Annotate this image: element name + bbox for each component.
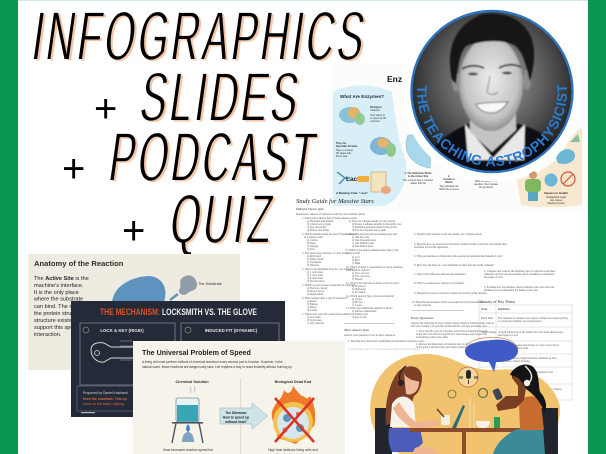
short answer column three: 5. Why are neutrinos so important in the supernova explosion mechanism of stars? — [414, 255, 504, 258]
glossary table: and rotating quickly — [498, 391, 520, 394]
step captions: within the enzyme — [439, 188, 460, 191]
headphones — [525, 366, 532, 384]
plus signs — [62, 87, 145, 253]
panel: study guide document — [296, 198, 572, 400]
caption: impact on health — [544, 191, 568, 205]
caption: impact on health: bloating & pain — [547, 201, 565, 205]
icon: left sparkle badge — [448, 390, 456, 398]
slide body text: It is the only place — [34, 290, 79, 296]
label column: They Are — [336, 142, 347, 145]
slide body text: The Active Site is the — [34, 276, 89, 282]
title shadow: QUIZ — [168, 181, 283, 259]
label column: Catalysts — [370, 109, 381, 112]
panel: lock and key — [80, 323, 175, 385]
icon: protein structure two — [370, 137, 396, 157]
slide heading: Anatomy of the Reaction — [34, 259, 124, 268]
peach health blob — [517, 128, 582, 207]
standing microphone — [470, 398, 474, 428]
icon: key — [91, 343, 135, 362]
short answer column three: 4. Describe how an onion-layer structure is formed inside of massive stars during their — [414, 243, 507, 246]
step captions — [403, 172, 499, 191]
caption: left: Heat increases reaction speed but — [163, 448, 213, 452]
multiple choice column two: c) Radiation pressure balances the gravity — [352, 226, 398, 229]
fringe — [404, 370, 420, 382]
glossary table: following the collapse event — [498, 347, 529, 350]
step captions: Work to catalyse the — [475, 180, 498, 183]
long hair — [512, 364, 546, 412]
arrow: the dilemma: How to speed up — [223, 416, 249, 420]
short answer column three: 1. Trace the life cycle of a massive star from its formation through — [416, 330, 488, 333]
multiple choice column one: a) Red dwarf — [307, 255, 321, 258]
multiple choice column one: b) Carbon and oxygen — [307, 223, 332, 226]
step captions: 2. — [448, 175, 450, 178]
short answer column three: evolution toward the supernova — [414, 246, 449, 249]
essay prompts right column: neutrinos have in modelling the deaths of the stars — [484, 289, 538, 292]
footer text box: move on the teach, helping — [83, 402, 124, 406]
multiple choice column two: a) Explosion — [352, 285, 366, 288]
label column: 3D shape that — [336, 152, 351, 155]
label column: Biological — [370, 106, 382, 109]
footer text box: Proposed by Daniel Koshland — [83, 391, 128, 395]
multiple choice column two — [344, 220, 425, 351]
neck — [470, 108, 516, 152]
step captions: the products — [479, 186, 494, 189]
essay prompts right column: remnants and how the observations allow scientists to understand — [484, 273, 555, 276]
title shadow: SLIDES — [138, 59, 309, 137]
multiple choice column two: c) G-type — [352, 304, 363, 307]
multiple choice column two: b) Implosion — [352, 288, 366, 291]
caption: impact on health: Undigested sugar — [546, 195, 566, 199]
multiple choice column two: a) The core collapses under its own gravity — [349, 220, 396, 223]
caption: right: High heat destroys living cells and — [268, 448, 318, 452]
glossary table: The remnant of a massive star whose collapse has caused gravity — [498, 317, 569, 320]
multiple choice column two: Answer each question in two to three sentences. — [344, 334, 396, 337]
glossary table: Definition — [498, 308, 510, 311]
slide: Anatomy of the Reaction — [28, 254, 240, 370]
slide body text: interaction. — [34, 332, 62, 338]
heading: What Are Enzymes: What Are Enzymes? — [340, 94, 384, 99]
multiple choice column one: Instructions: Answer all questions with the best available option — [296, 213, 365, 216]
title lettering: SLIDES — [136, 57, 307, 136]
icon: beaker on burner — [172, 386, 203, 443]
label column — [336, 106, 387, 158]
multiple choice column two: c) High — [352, 262, 361, 265]
bowl — [476, 421, 490, 428]
multiple choice column one: 4. What is the minimum mass for core collapse? — [302, 268, 355, 271]
woman on the right — [492, 364, 546, 454]
multiple choice column one: a) Pulsar — [307, 300, 317, 303]
essay prompts right column — [484, 270, 555, 292]
multiple choice column one: of a massive star? — [304, 236, 324, 239]
multiple choice column one: d) Neutron — [307, 264, 319, 267]
multiple choice column one: b) Solar mass — [307, 319, 322, 322]
step captions: 1. The Substrate Binds — [404, 172, 432, 175]
label column: Specialist Proteins — [336, 145, 358, 148]
blue background blob — [333, 85, 407, 206]
icon: burning cell crossed out — [272, 386, 315, 444]
shirt — [465, 124, 525, 160]
short answer column three: 3. Explain what happens to the star during core collapse events — [414, 233, 482, 236]
enzyme blob — [112, 276, 165, 302]
multiple choice column one: c) Iron and nickel — [307, 226, 326, 229]
divider — [239, 378, 242, 454]
multiple choice column one: c) Very massive — [307, 322, 325, 325]
portrait badge: The Teaching Astrophysicist — [410, 10, 574, 174]
multiple choice column one: c) Alpha ladder — [307, 293, 324, 296]
heading: study guide: Study Guide for Massive Stars — [296, 198, 374, 205]
panel: lock and key: LOCK & KEY (RIGID) — [100, 328, 144, 333]
multiple choice column two: c) One million years — [352, 242, 374, 245]
multiple choice column one: d) Iron — [307, 248, 315, 251]
green can — [494, 417, 500, 428]
white top — [390, 396, 416, 427]
icon: lactase molecule — [337, 172, 391, 194]
ears — [452, 72, 460, 92]
footer text box — [77, 386, 137, 413]
icon: microphone badge — [458, 367, 478, 387]
short answer column three: 2. Discuss the importance of massive stars in the chemical enrichment — [416, 343, 492, 346]
title: Infographics + Slides + Podcast + Quiz — [28, 0, 375, 259]
glossary table — [478, 299, 572, 400]
hair top — [510, 367, 519, 378]
multiple choice column one: 3. The onion layer structure of a star forms — [302, 252, 348, 255]
multiple choice column one: a) Electron capture — [307, 287, 328, 290]
panel: enzymes infographic — [331, 64, 585, 210]
legs — [412, 446, 438, 454]
slide body text: the protein structure — [34, 311, 84, 317]
short answer column three: to the end of its life and explain how mass shapes each stage of its — [416, 333, 487, 336]
multiple choice column two: c) Age of star — [352, 316, 367, 319]
multiple choice column one: 1. What is the primary fuel of main sequence stars? — [302, 217, 358, 220]
face — [404, 371, 419, 395]
nose shade — [487, 76, 498, 94]
icon: lactase molecule: Lact — [346, 176, 360, 183]
multiple choice column one: 5. Which process produces neutrinos in collapse? — [302, 284, 356, 287]
multiple choice column two: Short-Answer Quiz — [344, 328, 369, 332]
multiple choice column two: a) Low — [352, 256, 360, 259]
multiple choice column two: 11. What is the outcome of shock revival in stars? — [346, 282, 400, 285]
multiple choice column one: c) Oxygen — [307, 245, 319, 248]
multiple choice column two: c) Accretion — [352, 291, 366, 294]
multiple choice column one: d) 50 solar mass — [307, 280, 325, 283]
multiple choice column one: b) Neon — [307, 242, 316, 245]
short answer column three: 8. What is a neutron star and how is it formed? — [414, 282, 465, 285]
multiple choice column two: c) Fission — [352, 278, 363, 281]
glossary table: on the path to silicon burning — [498, 360, 530, 363]
essay prompts right column: 4. Compare and contrast the different types of supernova and their — [484, 270, 555, 273]
short answer column three: Essay Questions — [411, 316, 434, 320]
footer text box: fixes the substrate. This sp — [83, 397, 127, 401]
multiple choice column two: d) The star expands into a giant — [352, 229, 386, 232]
icon: pie and no sign — [544, 134, 580, 186]
arrow: the dilemma: without heat? — [224, 420, 247, 424]
multiple choice column one: b) White dwarf — [307, 258, 323, 261]
slide body text: can bind. The rest of — [34, 304, 85, 310]
icon: protein structure one — [339, 107, 365, 125]
multiple choice column one: b) Proton decay — [307, 290, 325, 293]
multiple choice column one: a) Hydrogen and helium — [307, 220, 334, 223]
label column: fits its task — [336, 155, 348, 158]
title lettering: PODCAST — [105, 117, 324, 196]
multiple choice column two: b) The s-process — [352, 275, 370, 278]
multiple choice column one: a) Carbon — [307, 239, 318, 242]
substrate label: The Substrate — [198, 282, 222, 286]
caption: impact on health: Impact on Health — [544, 191, 568, 195]
face and arm — [496, 372, 526, 411]
step captions: Creates a — [443, 178, 455, 181]
hair — [386, 366, 422, 425]
blue skirt — [388, 428, 423, 452]
jacket — [434, 123, 553, 171]
step captions: The enzyme has a complex — [403, 179, 434, 182]
smile — [476, 102, 508, 113]
multiple choice column one: b) Nebula — [307, 303, 318, 306]
multiple choice column two: 13. What does luminosity depend on most? — [346, 307, 393, 310]
step captions: Match — [445, 181, 453, 184]
multiple choice column two: d) One billion years — [352, 245, 373, 248]
multiple choice column one: d) Silicon and sulfur — [307, 229, 329, 232]
phone — [492, 388, 503, 401]
step captions: reaction, then release — [474, 183, 499, 186]
label column: reactions — [370, 120, 381, 123]
multiple choice column one — [296, 207, 365, 325]
slide body text: structure exists to — [34, 318, 78, 324]
white halo around portrait — [402, 2, 582, 182]
illustration: podcast scene — [370, 337, 560, 454]
essay prompts right column: 5. Evaluate how astronomers observe massive stars and what role — [484, 286, 555, 289]
short answer column three — [411, 233, 507, 349]
step captions: to the Active Site — [408, 175, 429, 178]
headphones — [400, 366, 406, 384]
short answer column three: and your reading. Use specific details and the concepts learned in class — [411, 325, 487, 328]
glossary table: with hydrogen envelope remaining — [498, 374, 536, 377]
slide: The Universal Problem of Speed — [133, 341, 345, 454]
label column: Their action is — [370, 114, 386, 117]
intro text: A living cell must perform millions of chemical reactions every second just to function. However, in the — [142, 360, 283, 364]
icon: person with stomach ache — [525, 171, 541, 201]
multiple choice column one: c) 8 solar mass — [307, 277, 323, 280]
short answer column three: of the galaxy and how they seed future generations — [416, 346, 471, 349]
panel: induced fit: INDUCED FIT (DYNAMIC) — [205, 328, 258, 333]
slide: The Mechanism — [71, 301, 285, 417]
plus signs: + — [62, 147, 85, 191]
glossary table: The type of supernova resulting from massive stars — [498, 371, 553, 374]
green left border — [0, 0, 18, 454]
title shadow — [30, 0, 375, 259]
subheading: biological dead end: Biological Dead End — [275, 380, 312, 384]
woman on the left — [386, 366, 450, 454]
slide body text: machine's interface. — [34, 283, 84, 289]
slide body text — [33, 276, 89, 338]
step captions: shape that fits — [410, 182, 427, 185]
glossary table: Core Collapse — [481, 331, 497, 334]
multiple choice column two: white dwarf? — [346, 252, 361, 255]
plus signs: + — [94, 87, 117, 131]
slide heading: The Universal Problem of Speed — [142, 349, 251, 357]
right chair — [540, 408, 558, 454]
glossary table: Glossary of Key Terms — [478, 299, 516, 304]
multiple choice column one: 7. Which stars end with a black hole remnant? — [302, 313, 353, 316]
eyes — [462, 66, 484, 69]
face — [459, 37, 523, 131]
multiple choice column two: b) One thousand years — [352, 239, 376, 242]
multiple choice column two: b) Mid — [352, 259, 360, 262]
caption: naming clue: A Naming Clue: "-ase" — [336, 191, 368, 195]
panel: induced fit — [180, 323, 280, 385]
short answer column three: 7. What is the difference between the remnants? — [414, 273, 466, 276]
multiple choice column two: a) O-type — [352, 298, 363, 301]
green right border — [588, 0, 606, 454]
multiple choice column two: from neutron capture? — [346, 269, 371, 272]
label column: Have a complex — [336, 149, 354, 152]
icon: right gear badge — [478, 388, 488, 398]
short answer column three: 10. Describe the elements which are produced by the massive stars — [412, 301, 484, 304]
speech bubble — [465, 337, 518, 372]
yellow blob background — [370, 354, 560, 454]
arm — [393, 402, 440, 429]
multiple choice column two: b) Fusion continues steadily in the stellar core — [352, 223, 402, 226]
multiple choice column two: b) Radius only — [352, 313, 368, 316]
multiple choice column two: 2. Explain how the iron core becomes unstable before the collapse. — [348, 348, 420, 351]
short answer column three: 9. Explain the process of neutron capture in massive stellar interiors — [414, 292, 487, 295]
multiple choice column one: a) 1 solar mass — [307, 271, 323, 274]
short answer column three: evolutionary path across time — [416, 336, 449, 339]
glossary table: The burning shells of light and heavy elements in stars — [498, 357, 557, 360]
title lettering — [28, 0, 373, 258]
step captions: The substrate fits — [439, 185, 459, 188]
caption: impact on health: can cause — [550, 199, 562, 202]
multiple choice column one: c) Supergiant — [307, 261, 322, 264]
glossary table: Term — [481, 308, 488, 311]
intro text: natural world, these reactions are dangerously slow. Life requires a way to react instantly without burning up. — [142, 365, 293, 369]
glossary table: so strong that nothing can escape from it — [498, 320, 542, 323]
multiple choice column one: a) Low mass — [307, 316, 321, 319]
multiple choice column one: Multiple Choice Quiz — [296, 207, 324, 211]
title lettering: QUIZ — [166, 179, 281, 258]
arrow: the dilemma — [220, 403, 268, 429]
multiple choice column two: a) Surface temperature — [352, 310, 377, 313]
curved name text: THE TEACHING ASTROPHYSICIST — [417, 84, 567, 166]
tablet — [452, 405, 465, 428]
multiple choice column one: c) Planet — [307, 306, 317, 309]
multiple choice column two: 10. Which of these is responsible for heavy elements — [346, 266, 403, 269]
caption: right — [268, 448, 318, 454]
slide body text: support this specific — [34, 325, 83, 331]
subheading: chemical solution: Chemical Solution — [175, 380, 209, 384]
multiple choice column two: a) One day only — [352, 236, 370, 239]
multiple choice column one: 6. What remains after a type II supernova? — [302, 297, 349, 300]
intro text — [142, 360, 293, 369]
arrow: the dilemma: The Dilemma: — [225, 411, 247, 415]
icon: enzyme pocket — [406, 135, 432, 168]
glossary table: Dense stellar core remnants of neutrons formed by collapse — [498, 388, 563, 391]
cup — [441, 415, 450, 425]
portrait ring — [412, 11, 572, 172]
multiple choice column two: a) The r-process — [352, 272, 369, 275]
mechanism heading: THE MECHANISM: LOCKSMITH VS. THE GLOVE — [100, 307, 257, 317]
essay prompts right column: the stages of stars — [484, 276, 503, 279]
hair — [450, 13, 534, 84]
multiple choice column two: 8. How long does the silicon burning stage last? — [346, 233, 398, 236]
multiple choice column one: b) 3 solar mass — [307, 274, 323, 277]
glossary table: Black Hole — [481, 317, 494, 320]
title shadow: PODCAST — [107, 119, 326, 197]
left chair — [375, 408, 392, 454]
substrate blob — [179, 275, 197, 295]
short answer column three: as they explode — [414, 304, 432, 307]
short answer column three: Answer the following in essay format, using evidence from the study sources — [411, 322, 494, 325]
multiple choice column one: 2. Which element marks the end of fusion in stars? — [302, 233, 357, 236]
multiple choice column two: 12. Which spectral type is the most massive? — [346, 295, 395, 298]
heading: Enz: Enz — [387, 74, 402, 84]
caption: left — [163, 448, 213, 454]
multiple choice column two: b) M-type — [352, 301, 364, 304]
glossary table: Rapid inward pressure and energy of a star's outer layers — [498, 344, 559, 347]
glossary table: and support is lost — [498, 334, 518, 337]
plus signs: + — [122, 209, 145, 253]
short answer column three: 6. How does the mass of a star determine its final fate and stellar remnant? — [414, 264, 495, 267]
multiple choice column two: 1. Describe how hydrostatic equilibrium is maintained in massive stars. — [348, 340, 425, 343]
orange top — [519, 396, 544, 430]
glossary table: A rapid fall inward of the stellar iron core when fusion stops — [498, 331, 563, 334]
multiple choice column two: 9. Which is the stellar remnant mass range of the — [346, 249, 399, 252]
multiple choice column one: d) Comet — [307, 309, 317, 312]
slide body text: where the substrate — [33, 296, 83, 302]
label column: to speed up life — [370, 117, 387, 120]
table — [410, 428, 522, 454]
teal trousers — [493, 428, 545, 454]
